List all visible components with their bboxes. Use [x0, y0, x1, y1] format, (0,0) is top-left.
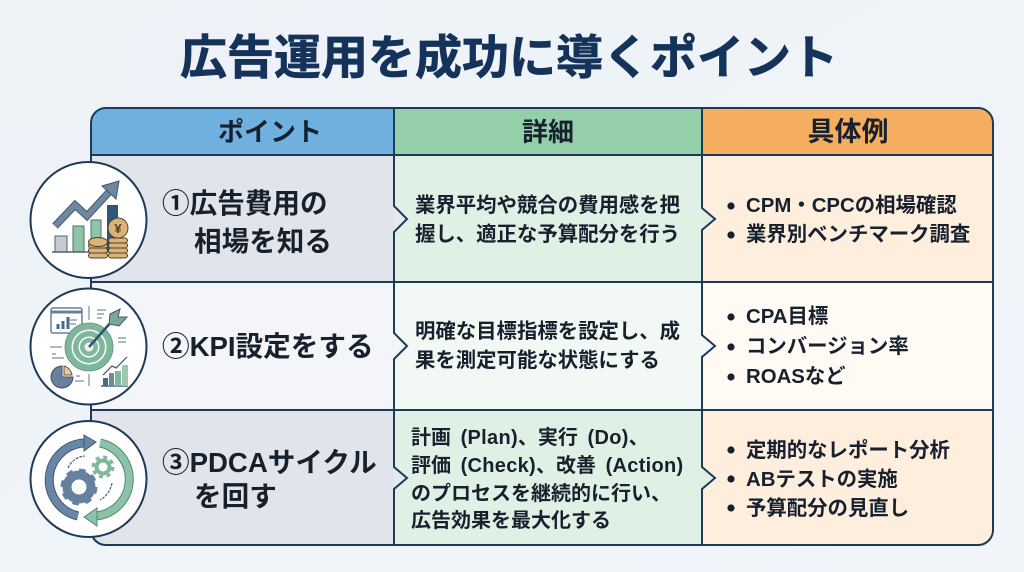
- row 2 detail: 果を測定可能な状態にする: [415, 349, 660, 372]
- icon: PDCA cycle with gears: [30, 421, 146, 537]
- row 2 examples: ROASなど: [746, 365, 846, 388]
- row 1 examples: [727, 194, 970, 246]
- row 3 examples: 予算配分の見直し: [746, 497, 909, 520]
- header: 具体例: 具体例: [808, 117, 888, 147]
- row 3 examples: ABテストの実施: [746, 468, 898, 491]
- row 1 label: ①広告費用の: [162, 188, 328, 219]
- row 3 examples: 定期的なレポート分析: [746, 439, 950, 462]
- row 1 examples: 業界別ベンチマーク調査: [746, 223, 970, 246]
- row 3 label: [162, 447, 377, 512]
- row 3 detail: [411, 426, 684, 532]
- row 1 detail: 業界平均や競合の費用感を把: [415, 193, 680, 217]
- comparison table: [91, 108, 993, 545]
- icon: target with arrow and charts: [30, 288, 146, 404]
- row 2 detail: [415, 319, 680, 372]
- row 1 label: [162, 188, 332, 257]
- icon: growth chart with coins: [30, 162, 146, 278]
- row 2 detail: 明確な目標指標を設定し、成: [415, 319, 680, 343]
- row 2 examples: CPA目標: [746, 305, 828, 328]
- row 1 detail: [415, 193, 680, 246]
- row 3 detail: 評価 (Check)、改善 (Action): [411, 454, 684, 477]
- row 1 label: 相場を知る: [194, 226, 332, 257]
- row 3 detail: 広告効果を最大化する: [411, 509, 611, 532]
- row 1 detail: 握し、適正な予算配分を行う: [415, 223, 680, 246]
- row 2 examples: [727, 305, 909, 388]
- row 2 examples: コンバージョン率: [746, 335, 909, 358]
- row 3 label: ③PDCAサイクル: [162, 447, 377, 478]
- icon: growth chart with coins: ¥: [114, 221, 122, 236]
- row 3 examples: [727, 439, 950, 520]
- row 2 label: ②KPI設定をする: [162, 331, 374, 362]
- title: 広告運用を成功に導くポイント: [180, 31, 838, 84]
- column headers: [218, 117, 888, 147]
- row 3 detail: のプロセスを継続的に行い、: [411, 482, 671, 505]
- row 3 label: を回す: [194, 481, 277, 512]
- header: ポイント: ポイント: [218, 117, 322, 147]
- chevron fills: [394, 208, 405, 487]
- header: 詳細: 詳細: [522, 117, 574, 147]
- row 1 examples: CPM・CPCの相場確認: [746, 194, 957, 217]
- row 3 detail: 計画 (Plan)、実行 (Do)、: [411, 426, 649, 449]
